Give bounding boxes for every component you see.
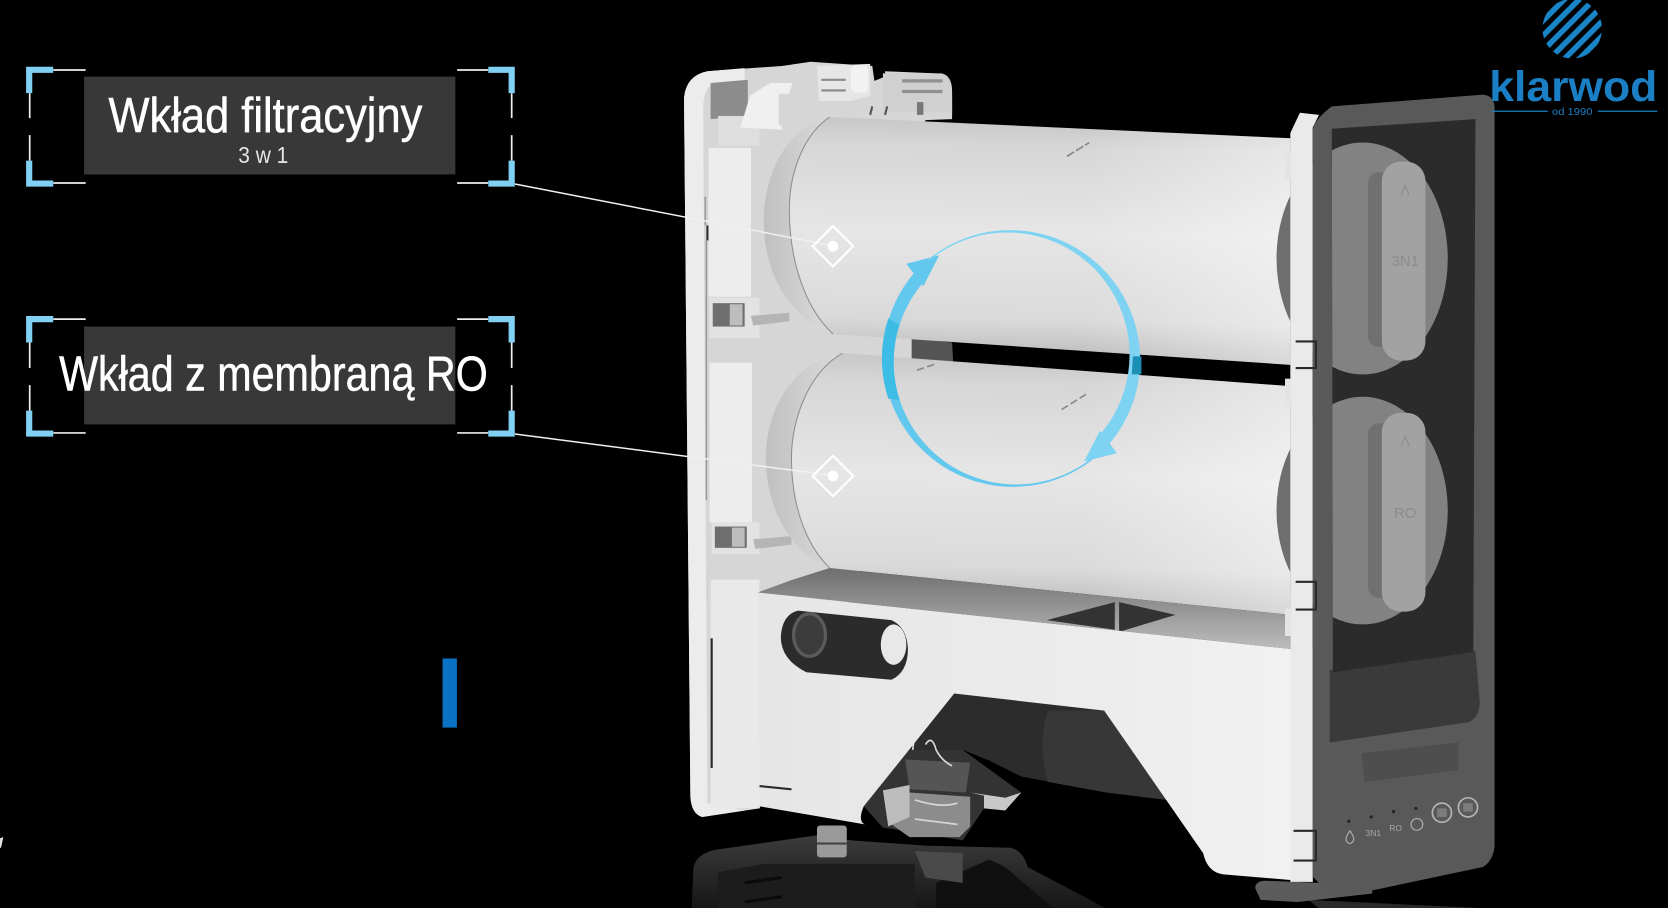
cartridge window <box>1332 119 1475 672</box>
leader line: filter cartridge <box>515 184 833 246</box>
front foot <box>1255 881 1372 902</box>
mounting blocks <box>708 148 751 297</box>
label: Wkład filtracyjny <box>29 70 512 184</box>
housing slot <box>760 786 791 789</box>
bracket frame <box>29 70 512 184</box>
marker: filter cartridge <box>813 226 853 266</box>
lower white housing <box>757 592 1313 882</box>
motor and electronics in notch <box>864 694 1167 840</box>
front panel <box>1312 94 1495 890</box>
left arc arrow <box>883 255 1095 487</box>
floor reflection <box>691 835 1489 908</box>
lower recess <box>1330 651 1480 742</box>
marker: RO cartridge <box>813 456 853 496</box>
top clips <box>711 64 952 146</box>
lower ledge <box>757 568 1290 649</box>
brackets <box>710 298 791 554</box>
heading: Wkład z membraną RO: Wkład z membraną RO <box>59 347 488 401</box>
dark slit <box>705 197 706 500</box>
cylinder: lower RO membrane cartridge <box>766 353 1290 615</box>
small text fragment at bottom left edge <box>0 837 3 848</box>
logo globe stripes <box>1542 0 1602 58</box>
device: water filter unit <box>684 62 1495 908</box>
label background <box>84 77 455 174</box>
cartridge cap: RO: RO <box>1394 506 1416 522</box>
logo tagline: od 1990 <box>1552 107 1593 118</box>
cartridge cap: 3N1: 3N1 <box>1392 254 1419 270</box>
circular flow arrows <box>882 230 1141 487</box>
cartridge cap: 3N1 <box>1332 142 1448 374</box>
display area <box>1362 742 1458 782</box>
ledge dark wedges <box>1047 602 1175 632</box>
logo: klarwod <box>1489 0 1657 118</box>
logo wordmark: klarwod <box>1489 63 1657 111</box>
sub-heading: 3 w 1: 3 w 1 <box>238 142 288 168</box>
right arc arrow <box>929 230 1140 462</box>
rear frame <box>684 62 953 817</box>
strip clips <box>1294 341 1316 861</box>
front edge strip <box>1285 113 1319 882</box>
rear foot <box>817 825 847 857</box>
outer rim <box>684 68 745 817</box>
central bracket between cylinders <box>912 338 953 362</box>
label background <box>84 327 455 424</box>
control icons: 3N1 <box>1366 828 1381 838</box>
bracket frame <box>29 319 512 434</box>
cylinder: upper filter cartridge <box>764 117 1290 365</box>
blue accent bar <box>443 658 457 728</box>
control icons: RO <box>1389 823 1402 833</box>
heading: Wkład filtracyjny: Wkład filtracyjny <box>109 89 423 143</box>
cartridge cap: RO <box>1332 396 1448 624</box>
leader line: RO cartridge <box>515 434 833 475</box>
logo rules <box>1491 110 1657 112</box>
oval window <box>781 611 908 680</box>
label: Wkład z membraną RO <box>29 319 512 434</box>
cartridge disc arcs <box>1277 143 1449 624</box>
control icons <box>1346 798 1478 844</box>
